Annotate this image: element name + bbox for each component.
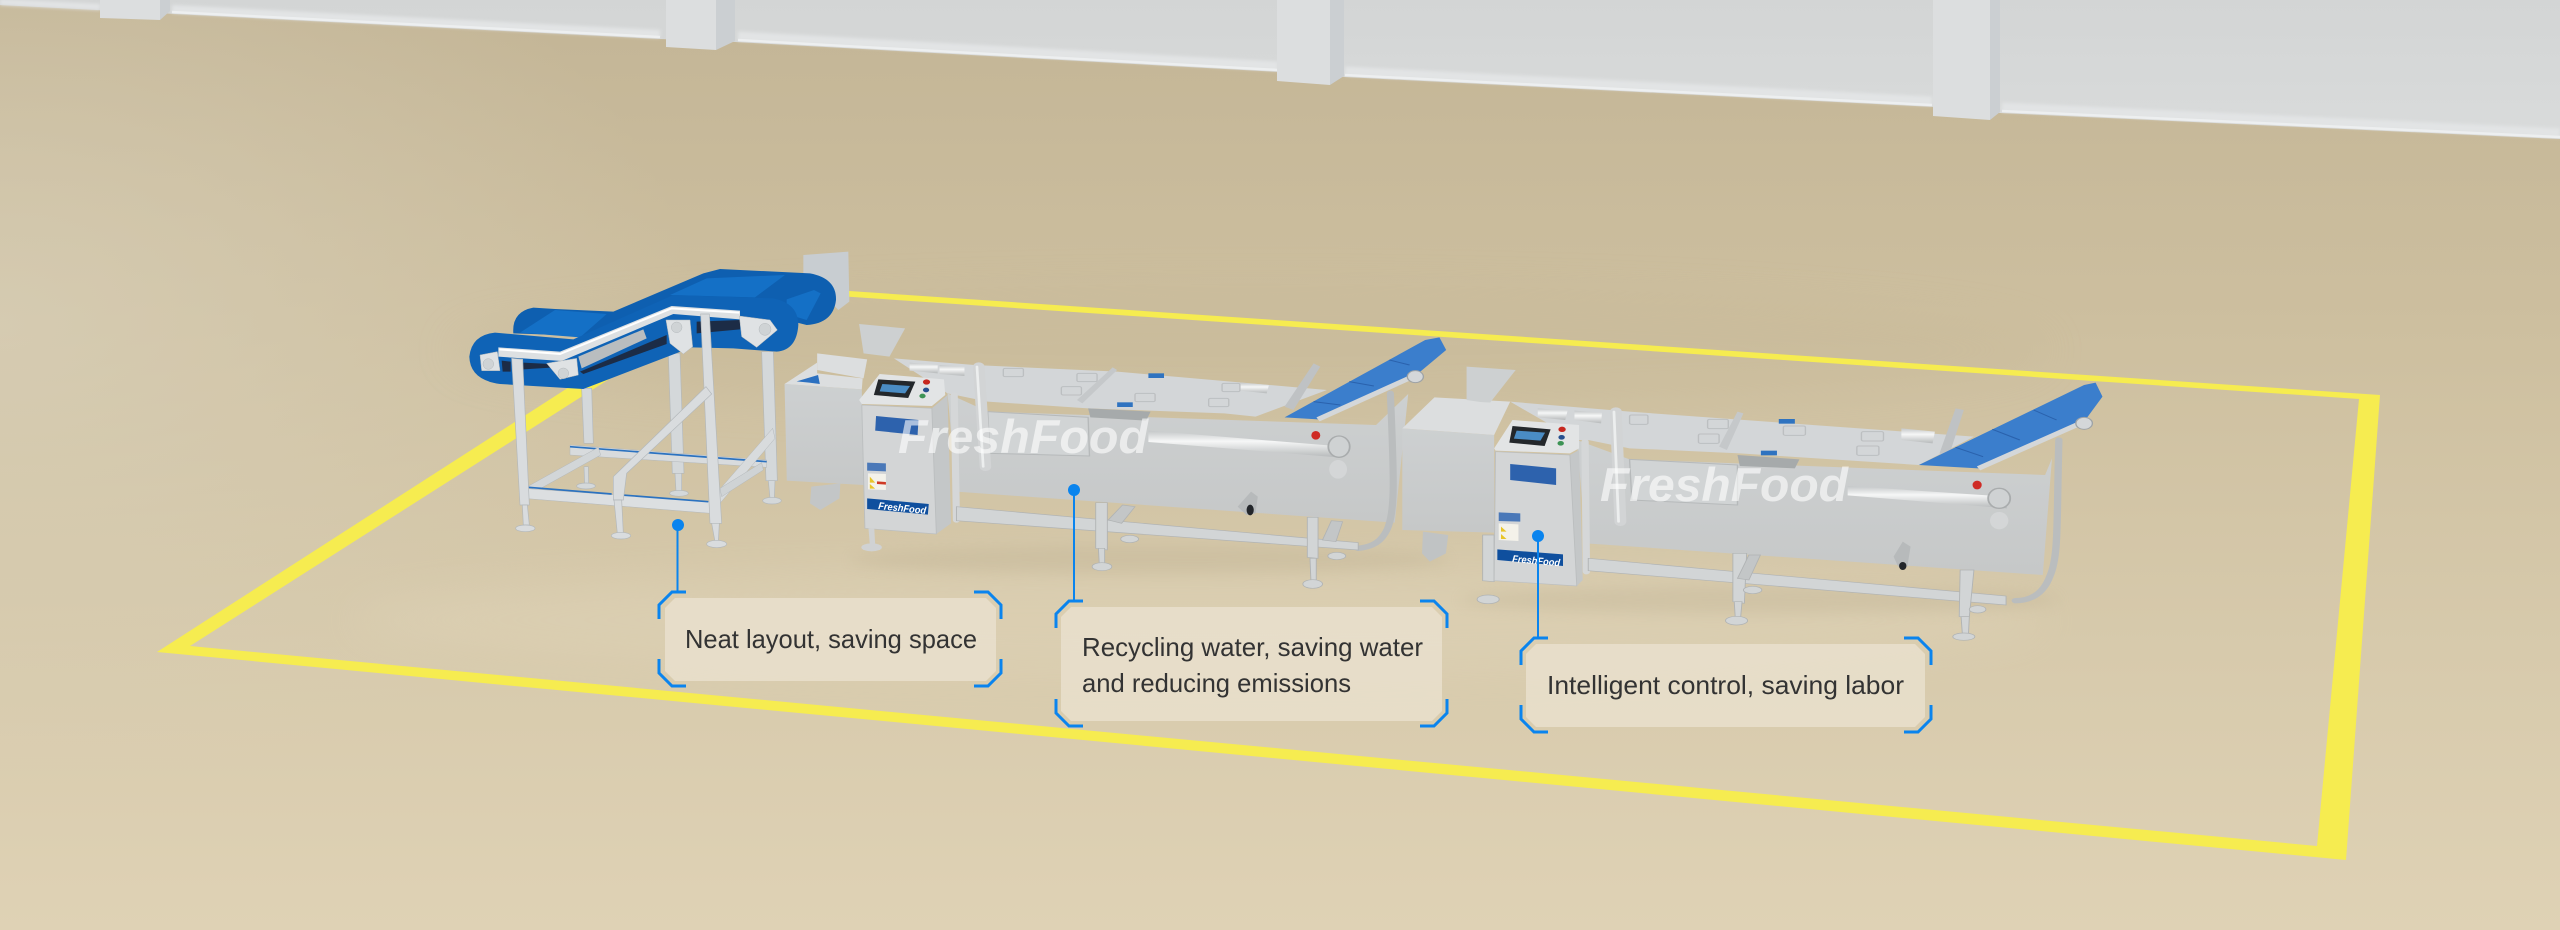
brand plate [867, 498, 929, 515]
inset door [1630, 459, 1737, 505]
touch screen [874, 379, 915, 398]
lower rail and legs [1477, 535, 2006, 640]
icon: motor box [803, 252, 849, 310]
lower rail and legs [956, 503, 1358, 588]
lid [894, 358, 1327, 417]
pulley plates [480, 316, 777, 379]
control cabinet [1494, 420, 1583, 586]
watermark 2: FreshFood [1600, 458, 1849, 511]
front legs [512, 314, 727, 548]
horizontal tube [1148, 431, 1350, 479]
brand plate text 2: FreshFood [1512, 554, 1561, 569]
drain valve [1238, 492, 1258, 515]
callout: neat layout [659, 519, 1001, 686]
side pipes [954, 367, 1393, 548]
silver roller section [578, 329, 647, 368]
horizontal tube [1848, 481, 2010, 529]
floor shadows under machines [850, 546, 2060, 614]
tank and hopper [785, 324, 905, 510]
watermark 1: FreshFood [898, 410, 1149, 463]
buttons [1558, 427, 1566, 432]
side pipes [1585, 412, 2059, 601]
cabinet foot [868, 528, 875, 545]
drive chain [502, 317, 768, 374]
buttons [923, 379, 930, 385]
callout: recycling water [1056, 484, 1447, 726]
touch screen [1509, 426, 1551, 446]
top rail [498, 306, 740, 361]
washing machine 1 [785, 324, 1446, 588]
back wall with pillars [0, 0, 2560, 139]
callout: recycling water: Recycling water, saving water [1082, 632, 1423, 662]
lid [1510, 402, 1974, 465]
rear belt [513, 269, 836, 337]
callout: neat layout: Neat layout, saving space [685, 624, 977, 654]
yellow floor marking [157, 283, 2380, 860]
callout: intelligent control [1521, 530, 1931, 732]
front face [948, 393, 1408, 523]
brand plate text 1: FreshFood [878, 501, 927, 517]
tank and hopper [1402, 367, 1516, 562]
blue nameplate [1510, 464, 1556, 485]
lid fittings [910, 363, 1320, 410]
warning label [868, 473, 886, 490]
drain valve [1894, 542, 1911, 567]
inset door [988, 412, 1089, 456]
lid fittings [1538, 408, 1964, 457]
callout: intelligent control: Intelligent control, saving labor [1547, 670, 1904, 700]
control cabinet [859, 374, 951, 551]
washing machine 2 [1402, 367, 2102, 640]
rear conveyor section [1919, 383, 2102, 468]
brand plate [1497, 549, 1563, 566]
rear conveyor section [1285, 337, 1446, 419]
front face [1577, 440, 2052, 575]
rear legs [577, 352, 781, 504]
warning label [1499, 523, 1518, 541]
belt trough surfaces [520, 275, 821, 337]
front belt [469, 295, 798, 389]
infeed conveyor [469, 252, 849, 548]
callout: recycling water: and reducing emissions [1082, 668, 1351, 698]
blue nameplate [875, 416, 918, 435]
bottom frame [523, 428, 775, 513]
